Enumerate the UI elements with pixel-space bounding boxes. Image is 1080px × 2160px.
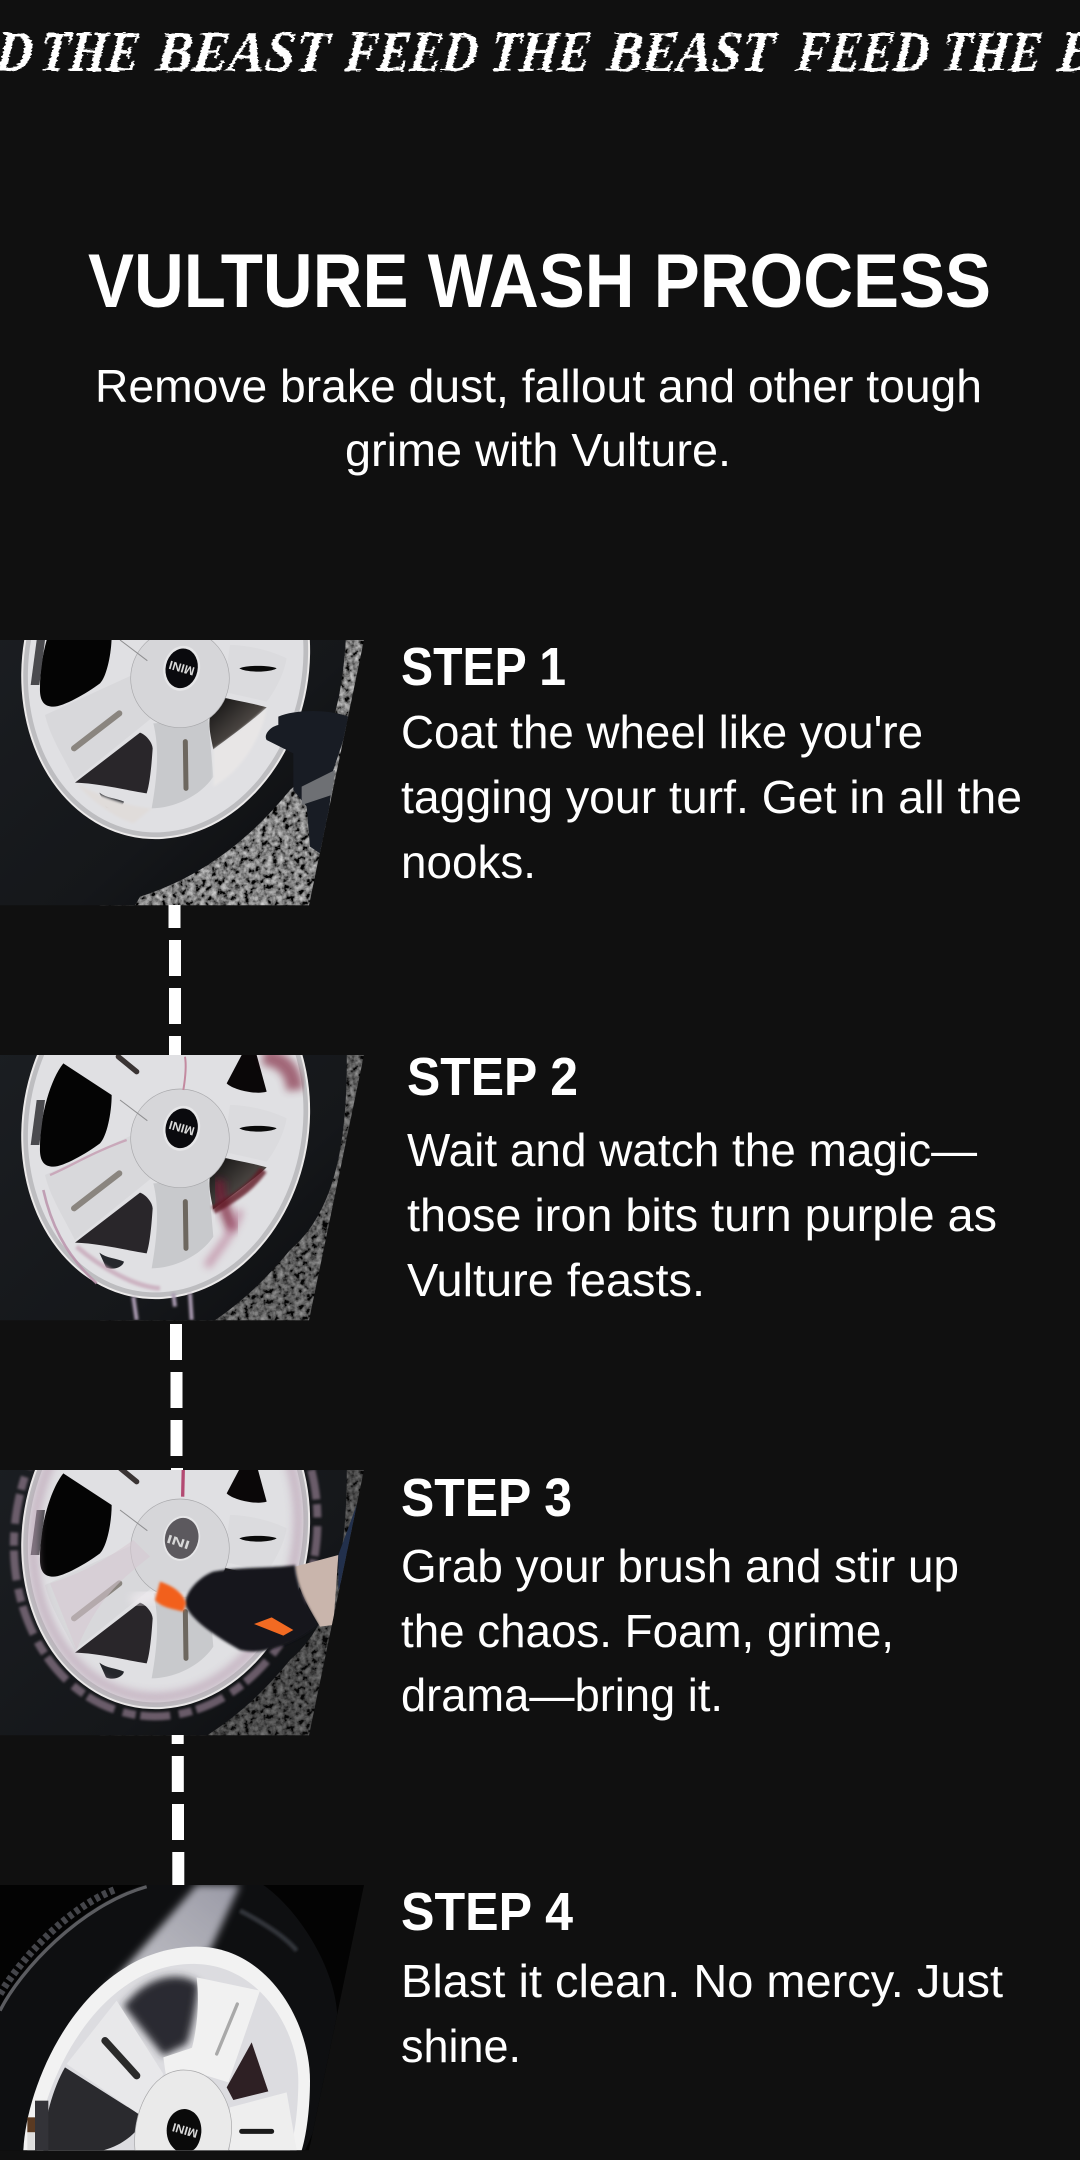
step 4 description: Blast it clean. No mercy. Just: [401, 1955, 1003, 2007]
photo: wheel coated with cleaner: MINI: [167, 658, 196, 678]
step 1 heading: STEP 1: [401, 637, 566, 697]
title: VULTURE WASH PROCESS: [88, 239, 991, 324]
subtitle: grime with Vulture.: [345, 424, 731, 476]
connector: dashed line step 2 to 3: [170, 1324, 183, 1470]
banner: feed the beast repeating strip: THE: [488, 19, 594, 84]
connector: dashed line step 3 to 4: [172, 1735, 184, 1885]
step 1 description: tagging your turf. Get in all the: [401, 771, 1022, 823]
photo: gloved hand brushing foamy wheel: INI: [165, 1532, 191, 1552]
step 4 heading: STEP 4: [401, 1882, 573, 1942]
step 4 description: shine.: [401, 2020, 521, 2072]
orange brush handle: [254, 1617, 293, 1636]
step 3 heading: STEP 3: [401, 1468, 572, 1528]
banner: feed the beast repeating strip: THE: [939, 19, 1045, 84]
panel: step 1: [0, 640, 1020, 906]
photo: wheel bleeding purple: [0, 1055, 364, 1320]
rim: [23, 1947, 310, 2150]
photo: pressure washer rinsing wheel: [0, 1885, 364, 2150]
step 4 description: [401, 1955, 1003, 2072]
photo: wheel bleeding purple: MINI: [167, 1118, 196, 1138]
step 3 description: drama—bring it.: [401, 1669, 723, 1721]
step 1 description: Coat the wheel like you're: [401, 706, 923, 758]
tire: [0, 1885, 337, 2150]
banner: feed the beast repeating strip: FEED: [342, 19, 481, 84]
photo: gloved hand brushing foamy wheel: [0, 1470, 364, 1736]
subtitle: [95, 360, 982, 476]
step 3 description: the chaos. Foam, grime,: [401, 1605, 894, 1657]
step 2 heading: STEP 2: [407, 1047, 578, 1107]
step 2 description: those iron bits turn purple as: [407, 1189, 997, 1241]
banner: feed the beast repeating strip: [0, 19, 1080, 84]
banner: feed the beast repeating strip: BEAST: [604, 19, 780, 84]
step 3 description: Grab your brush and stir up: [401, 1540, 959, 1592]
banner: feed the beast repeating strip: FEED: [793, 19, 932, 84]
panel: step 3: [0, 1470, 958, 1736]
subtitle: Remove brake dust, fallout and other tough: [95, 360, 982, 412]
glove: [266, 711, 348, 853]
water spray: [104, 1885, 244, 1983]
photo: pressure washer rinsing wheel: MINI: [171, 2120, 200, 2141]
black glove: [185, 1565, 318, 1652]
step 3 description: [401, 1540, 959, 1721]
step 1 description: [401, 706, 1022, 888]
step 2 description: [407, 1124, 997, 1306]
banner: feed the beast repeating strip: BEAST: [153, 19, 335, 84]
forearm: [295, 1555, 338, 1627]
step 2 description: Vulture feasts.: [407, 1254, 705, 1306]
step 1 description: nooks.: [401, 836, 536, 888]
step 2 description: Wait and watch the magic—: [407, 1124, 977, 1176]
orange brush head: [155, 1582, 186, 1612]
panel: step 4: [0, 1882, 1003, 2150]
banner: feed the beast repeating strip: THE: [37, 19, 143, 84]
connector: dashed line step 1 to 2: [168, 905, 181, 1055]
panel: step 2: [0, 1055, 996, 1320]
photo: wheel coated with cleaner: [0, 640, 364, 906]
